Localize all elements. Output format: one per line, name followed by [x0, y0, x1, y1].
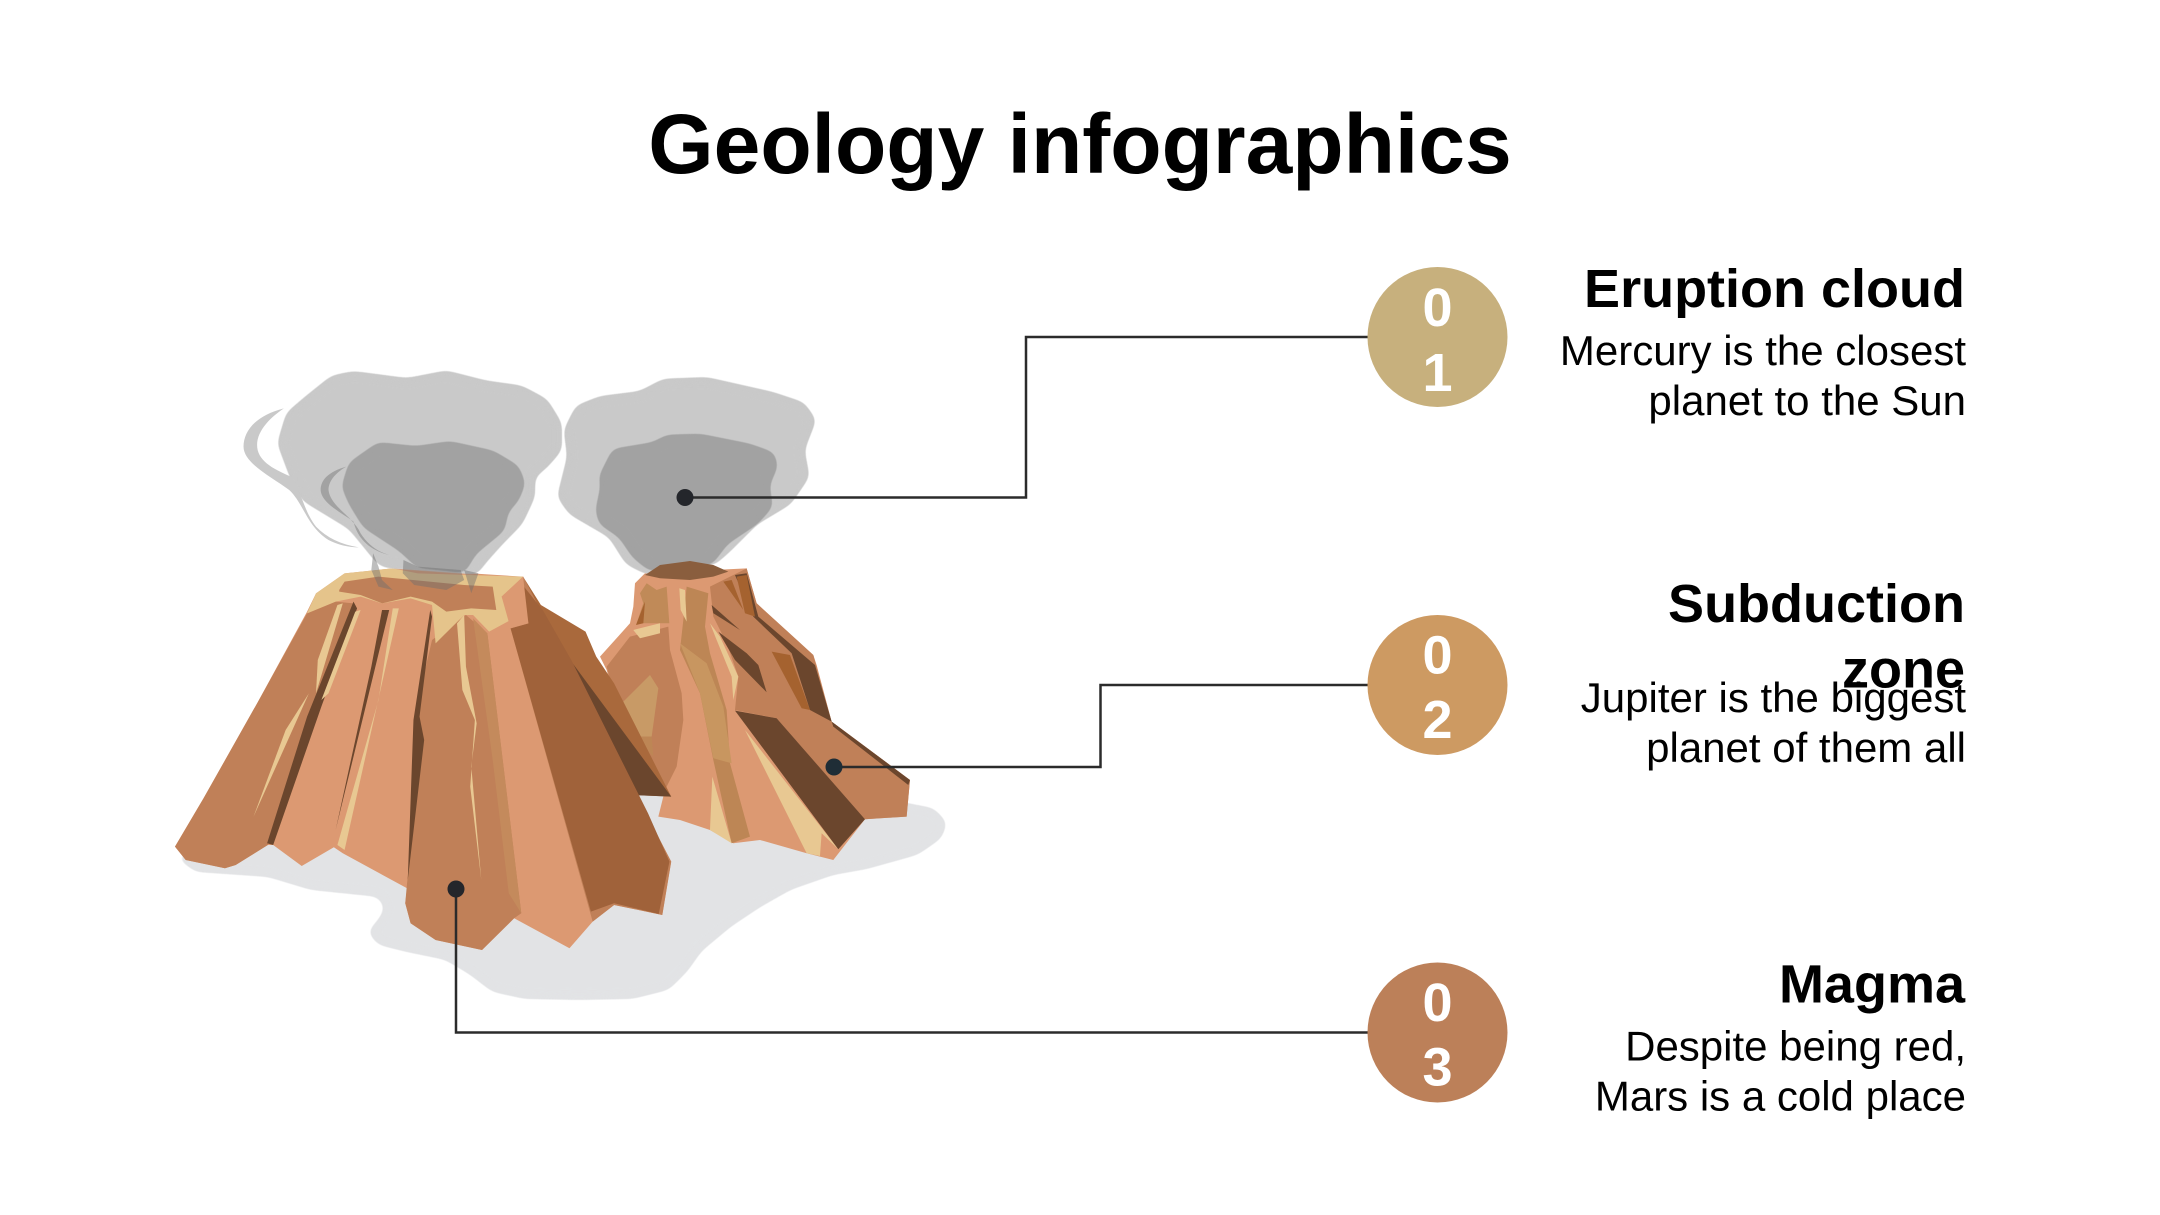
- large volcano: [175, 568, 671, 950]
- badge 01: 0: [1422, 278, 1453, 338]
- small crater: [645, 561, 728, 580]
- badge 02: [1368, 615, 1508, 755]
- title: Geology infographics: [648, 97, 1512, 191]
- ground shadow: [179, 760, 945, 998]
- text: eruption cloud: Eruption cloud: [1584, 259, 1965, 319]
- badge 02: 0: [1422, 626, 1453, 686]
- text: eruption cloud: [1560, 259, 1966, 424]
- text: magma: [1595, 954, 1966, 1120]
- text: magma: Despite being red,: [1625, 1022, 1966, 1070]
- connector 2: [826, 685, 1368, 776]
- connector 1: [676, 337, 1368, 506]
- large eruption cloud: [244, 372, 561, 593]
- text: subduction zone: zone: [1842, 640, 1965, 700]
- badge 02: 2: [1422, 690, 1453, 750]
- badge 03: [1368, 962, 1508, 1102]
- small volcano: [600, 568, 910, 860]
- text: eruption cloud: planet to the Sun: [1648, 377, 1966, 424]
- badge 03: 0: [1422, 973, 1453, 1033]
- badge 01: [1368, 267, 1508, 407]
- text: subduction zone: Jupiter is the biggest: [1581, 674, 1966, 721]
- text: magma: Mars is a cold place: [1595, 1072, 1966, 1120]
- text: subduction zone: [1581, 574, 1966, 771]
- illustration: volcanoes: [175, 372, 945, 998]
- small eruption cloud: [558, 378, 815, 580]
- badge 01: 1: [1422, 343, 1453, 403]
- text: subduction zone: Subduction: [1668, 574, 1965, 634]
- text: subduction zone: planet of them all: [1646, 724, 1966, 771]
- text: eruption cloud: Mercury is the closest: [1560, 327, 1966, 374]
- badge 03: 3: [1422, 1038, 1453, 1098]
- text: magma: Magma: [1779, 954, 1966, 1014]
- connector 3: [448, 880, 1368, 1032]
